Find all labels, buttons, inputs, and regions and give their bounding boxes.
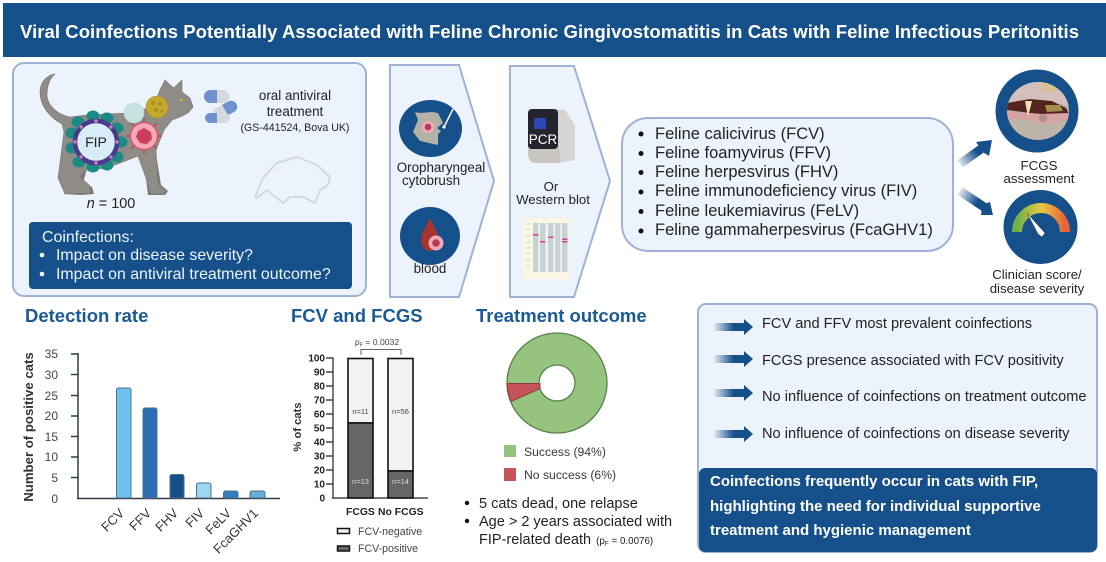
icon: severity gauge bbox=[1004, 190, 1078, 264]
icon: Switzerland outline bbox=[255, 157, 330, 203]
stacked bar chart: FCV and FCGS: 90 bbox=[314, 368, 325, 378]
bar chart: detection rate: 5 bbox=[51, 471, 58, 485]
donut chart: treatment outcome bbox=[507, 333, 607, 433]
icon: antiviral pills bbox=[204, 90, 239, 123]
blood label: blood bbox=[414, 261, 446, 276]
stacked bar chart: FCV and FCGS: 50 bbox=[314, 424, 325, 434]
panel: viruses tested: Feline gammaherpesvirus (FcaGHV1) bbox=[655, 221, 933, 239]
panel: key findings bbox=[698, 304, 1097, 552]
panel: sampling bbox=[390, 65, 494, 297]
finding 1: FCV and FFV most prevalent coinfections bbox=[762, 316, 1032, 332]
donut legend: Success (94%) bbox=[524, 445, 606, 459]
x axis labels: FcaGHV1 bbox=[210, 506, 261, 556]
legend: FCV-negative bbox=[358, 526, 422, 538]
yellow virus bbox=[146, 96, 168, 118]
panel: detection methods bbox=[510, 66, 610, 297]
legend: FCV-positive bbox=[358, 543, 418, 555]
stacked bar chart: FCV and FCGS: n=13 bbox=[352, 477, 369, 486]
donut legend: No success (6%) bbox=[524, 468, 616, 482]
stacked bar chart: FCV and FCGS: No FCGS bbox=[378, 507, 424, 518]
donut slice: no success bbox=[507, 384, 540, 402]
significance bracket: F bbox=[360, 342, 364, 348]
cytobrush label: Oropharyngeal bbox=[397, 160, 485, 175]
icon: cat with FIP and coinfecting viruses bbox=[40, 74, 193, 195]
stacked bar chart: FCV and FCGS: 40 bbox=[314, 438, 325, 448]
FCGS assessment label: assessment bbox=[1004, 171, 1075, 186]
legend bbox=[338, 526, 422, 555]
bar chart: detection rate: 25 bbox=[45, 389, 58, 403]
outcome bullet notes: FIP-related death (p bbox=[479, 532, 605, 548]
stacked bar chart: FCV and FCGS: 10 bbox=[314, 480, 325, 490]
outcome bullet notes: Age > 2 years associated with bbox=[479, 514, 672, 530]
finding 4: No influence of coinfections on disease severity bbox=[762, 426, 1070, 442]
method label: Or bbox=[544, 179, 559, 194]
cytobrush label bbox=[397, 160, 485, 188]
panel: viruses tested bbox=[622, 118, 953, 251]
donut legend bbox=[504, 445, 616, 482]
arrow: to FCGS assessment bbox=[957, 140, 992, 168]
method label: Western blot bbox=[516, 192, 590, 207]
x axis labels: FFV bbox=[126, 505, 154, 533]
finding 3: No influence of coinfections on treatment outcome bbox=[762, 389, 1086, 405]
outcome bullet notes: F bbox=[605, 540, 609, 548]
stacked bar chart: FCV and FCGS bbox=[292, 337, 428, 555]
FCGS assessment label: FCGS bbox=[1021, 158, 1058, 173]
FIP virus: FIP bbox=[85, 134, 107, 150]
significance bracket: p bbox=[355, 337, 360, 347]
red virus bbox=[126, 118, 162, 154]
icon: PCR machine bbox=[528, 109, 575, 163]
stacked bar chart: FCV and FCGS: 60 bbox=[314, 410, 325, 420]
question box: coinfections: Impact on disease severity? bbox=[56, 247, 253, 264]
stacked bar chart: FCV and FCGS: 0 bbox=[319, 494, 325, 504]
bar chart: detection rate: 10 bbox=[45, 450, 58, 464]
stacked bar chart: FCV and FCGS: 30 bbox=[314, 452, 325, 462]
outcome bullet notes bbox=[465, 496, 672, 548]
bar chart: detection rate: 30 bbox=[45, 368, 58, 382]
conclusion box: highlighting the need for individual supportive bbox=[710, 498, 1041, 515]
clinician score label: Clinician score/ bbox=[992, 267, 1082, 282]
panel: viruses tested: Feline calicivirus (FCV) bbox=[655, 125, 825, 143]
bar: FCGS bbox=[348, 358, 373, 498]
bar chart: detection rate: 35 bbox=[45, 347, 58, 361]
icon: oropharyngeal cytobrush bbox=[399, 100, 462, 157]
x axis labels: FHV bbox=[152, 505, 181, 535]
outcome bullet notes: 5 cats dead, one relapse bbox=[479, 496, 638, 512]
FIP virus bbox=[73, 119, 119, 165]
x axis labels bbox=[98, 505, 261, 556]
treatment text bbox=[241, 88, 349, 134]
stacked bar chart: FCV and FCGS: 100 bbox=[308, 354, 325, 364]
finding 2: FCGS presence associated with FCV positivity bbox=[762, 353, 1064, 369]
bar: No FCGS bbox=[388, 358, 413, 498]
conclusion box: Coinfections frequently occur in cats with FIP, bbox=[710, 473, 1038, 490]
stacked bar chart: FCV and FCGS: % of cats bbox=[292, 402, 304, 452]
heading: FCV and FCGS: FCV and FCGS bbox=[291, 305, 423, 326]
icon: FCGS mouth photo bbox=[996, 70, 1078, 152]
y axis label: Number of positive cats bbox=[21, 352, 36, 502]
question box: coinfections bbox=[29, 222, 352, 289]
outcome bullet notes: = 0.0076) bbox=[609, 536, 653, 547]
x axis labels: FCV bbox=[98, 505, 127, 535]
bar chart: detection rate: 0 bbox=[51, 492, 58, 506]
teal spike proteins bbox=[66, 110, 128, 172]
treatment text: treatment bbox=[267, 104, 324, 119]
x axis labels: FeLV bbox=[202, 505, 234, 537]
finding 3 bbox=[714, 385, 1086, 405]
stacked bar chart: FCV and FCGS: 80 bbox=[314, 382, 325, 392]
title banner: Viral Coinfections Potentially Associated with Feline Chronic Gingivostomatitis in Cats with Feline Infectious Peritonitis bbox=[20, 21, 1079, 42]
bar chart: detection rate: 15 bbox=[45, 430, 58, 444]
stacked bar chart: FCV and FCGS: n=11 bbox=[352, 407, 369, 416]
stacked bar chart: FCV and FCGS: n=14 bbox=[392, 477, 409, 486]
panel: viruses tested: Feline herpesvirus (FHV) bbox=[655, 163, 838, 181]
significance bracket bbox=[355, 337, 401, 355]
x axis labels: FIV bbox=[182, 505, 207, 530]
conclusion box bbox=[699, 468, 1097, 552]
panel: viruses tested: Feline foamyvirus (FFV) bbox=[655, 144, 831, 162]
question box: coinfections: Impact on antiviral treatment outcome? bbox=[56, 266, 331, 283]
icon: PCR machine: PCR bbox=[529, 132, 557, 147]
bars bbox=[116, 388, 265, 498]
treatment text: oral antiviral bbox=[259, 88, 331, 103]
clinician score label: disease severity bbox=[990, 281, 1085, 296]
treatment text: (GS-441524, Bova UK) bbox=[241, 122, 349, 134]
bar chart: detection rate bbox=[21, 347, 280, 556]
title banner bbox=[3, 3, 1106, 57]
conclusion box: treatment and hygienic management bbox=[710, 522, 971, 539]
heading: detection rate: Detection rate bbox=[25, 305, 148, 326]
icon: blood drop bbox=[400, 207, 460, 265]
sample size: n = 100 bbox=[87, 196, 135, 212]
heading: treatment outcome: Treatment outcome bbox=[476, 305, 647, 326]
stacked bar chart: FCV and FCGS: FCGS bbox=[346, 507, 375, 518]
panel: viruses tested: Feline immunodeficiency virus (FIV) bbox=[655, 182, 917, 200]
clinician score label bbox=[990, 267, 1085, 296]
method label bbox=[516, 179, 590, 207]
panel: viruses tested: Feline leukemiavirus (FeLV) bbox=[655, 202, 859, 220]
bar chart: detection rate: 20 bbox=[45, 409, 58, 423]
stacked bar chart: FCV and FCGS: 70 bbox=[314, 396, 325, 406]
arrow: to clinician score bbox=[958, 187, 993, 215]
FCGS assessment label bbox=[1004, 158, 1075, 186]
panel: study population bbox=[13, 63, 366, 296]
pale virus bbox=[124, 103, 144, 123]
significance bracket: = 0.0032 bbox=[363, 337, 399, 347]
icon: western blot bbox=[523, 218, 570, 279]
question box: coinfections: Coinfections: bbox=[42, 229, 134, 246]
stacked bar chart: FCV and FCGS: n=56 bbox=[392, 407, 409, 416]
cytobrush label: cytobrush bbox=[402, 173, 460, 188]
stacked bar chart: FCV and FCGS: 20 bbox=[314, 466, 325, 476]
